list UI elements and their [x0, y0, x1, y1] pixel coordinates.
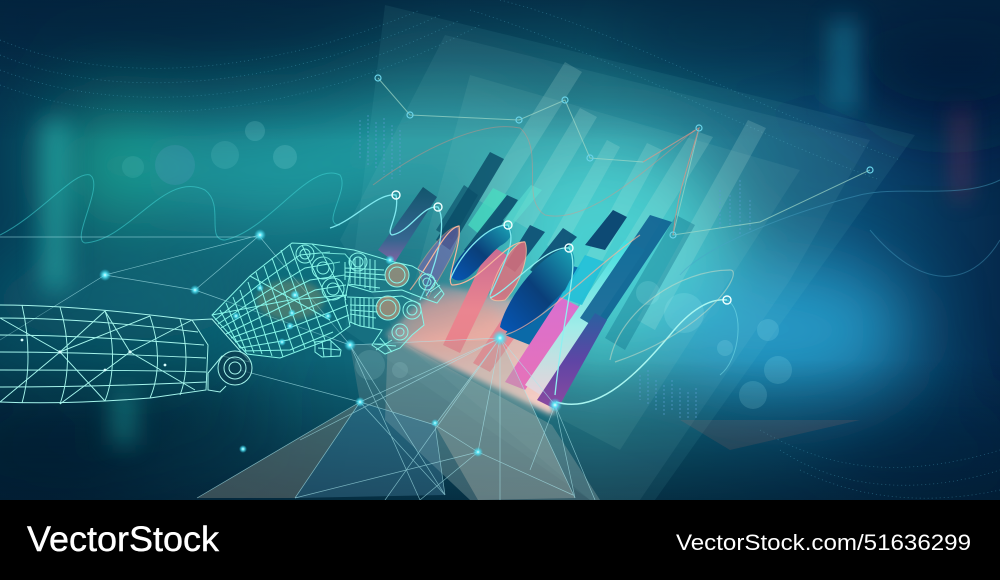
bar: dark mid	[464, 195, 518, 250]
right triangle edge	[680, 420, 860, 450]
wave: faded coral	[373, 127, 695, 216]
bar: pale teal	[503, 185, 542, 228]
bar: dark left	[378, 187, 437, 262]
chart small blue column patterns	[360, 115, 750, 420]
palm outline	[212, 243, 352, 358]
bar: teal mid	[436, 185, 478, 233]
bar: coral 2	[473, 318, 514, 372]
knuckles	[296, 245, 314, 263]
bar: dark big top	[585, 210, 627, 250]
bar: dark fourth	[530, 228, 577, 272]
wave: coral under curve	[410, 226, 733, 362]
wave: main cyan with circles	[330, 195, 738, 404]
panel: tilted chart sheet back	[345, 5, 915, 500]
teardrop: coral lobe left	[418, 227, 458, 298]
bar: purple	[537, 313, 607, 410]
bar: dark blue right	[580, 215, 672, 330]
teardrop: coral lobe mid	[490, 242, 526, 301]
bar: coral	[443, 245, 507, 353]
footer image id: VectorStock.com/51636299	[676, 530, 971, 555]
line chart upper	[378, 78, 870, 235]
floor glow	[405, 295, 505, 355]
robot arm wireframe	[0, 305, 208, 404]
bokeh circles	[122, 121, 792, 409]
bar chart	[378, 152, 695, 410]
bar: cyan mid	[560, 255, 605, 305]
lower finger	[347, 296, 424, 354]
panel: tilted chart sheet front	[340, 35, 870, 500]
small finger	[315, 340, 341, 357]
upper finger	[312, 244, 444, 303]
bar: dark right	[505, 225, 545, 272]
bar: green top	[468, 188, 507, 235]
value circles	[392, 191, 731, 304]
pale grey floor band	[385, 335, 600, 500]
wave: faded cyan left	[0, 173, 342, 243]
palm glow	[256, 280, 324, 320]
robot hand wireframe	[212, 243, 444, 358]
network nodes	[99, 229, 562, 457]
wrist joint	[192, 319, 252, 392]
teardrop: dark blue 2	[500, 248, 574, 332]
wave: right dim	[680, 180, 1000, 275]
network lines	[0, 235, 595, 500]
footer bar	[0, 500, 1000, 580]
footer logo text: VectorStock	[27, 520, 220, 559]
pale background bars	[478, 62, 766, 330]
bar: dim teal right	[605, 215, 695, 350]
panel: chart sheet inner	[400, 75, 800, 450]
teardrop: dark blue 1	[450, 225, 511, 281]
bar: dark tall	[436, 152, 504, 250]
bar: pink	[505, 297, 582, 390]
network triangles lower	[197, 402, 360, 498]
bar: cyan pale	[525, 240, 631, 395]
hand nodes	[232, 255, 395, 346]
glowing floor of the chart	[385, 285, 590, 415]
arm nodes	[21, 339, 166, 371]
line chart nodes	[375, 75, 873, 238]
palm mesh	[215, 252, 349, 351]
bar: blue fourth	[505, 260, 580, 345]
